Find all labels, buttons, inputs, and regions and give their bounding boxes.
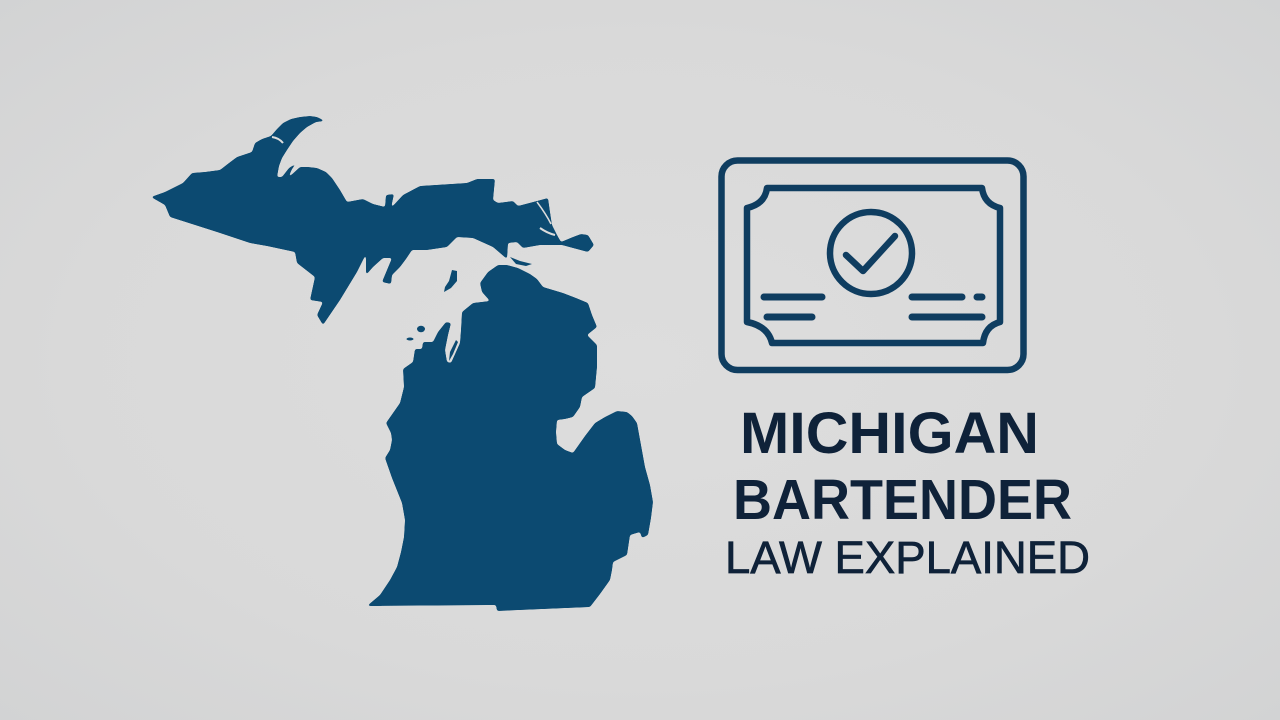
check badge [830,212,912,294]
subtitle: Law Explained: LAW EXPLAINED [725,532,1090,583]
certificate text lines [764,297,982,317]
icon: certificate with check mark [722,160,1024,370]
title line: Bartender: BARTENDER [733,468,1072,532]
certificate outer frame [722,160,1024,370]
title [725,401,1090,583]
lower peninsula [367,265,653,611]
map: Michigan silhouette [151,116,653,611]
certificate inner border [747,188,1000,343]
islands [406,257,532,361]
title line: Michigan: MICHIGAN [740,401,1039,466]
upper peninsula [151,116,594,325]
